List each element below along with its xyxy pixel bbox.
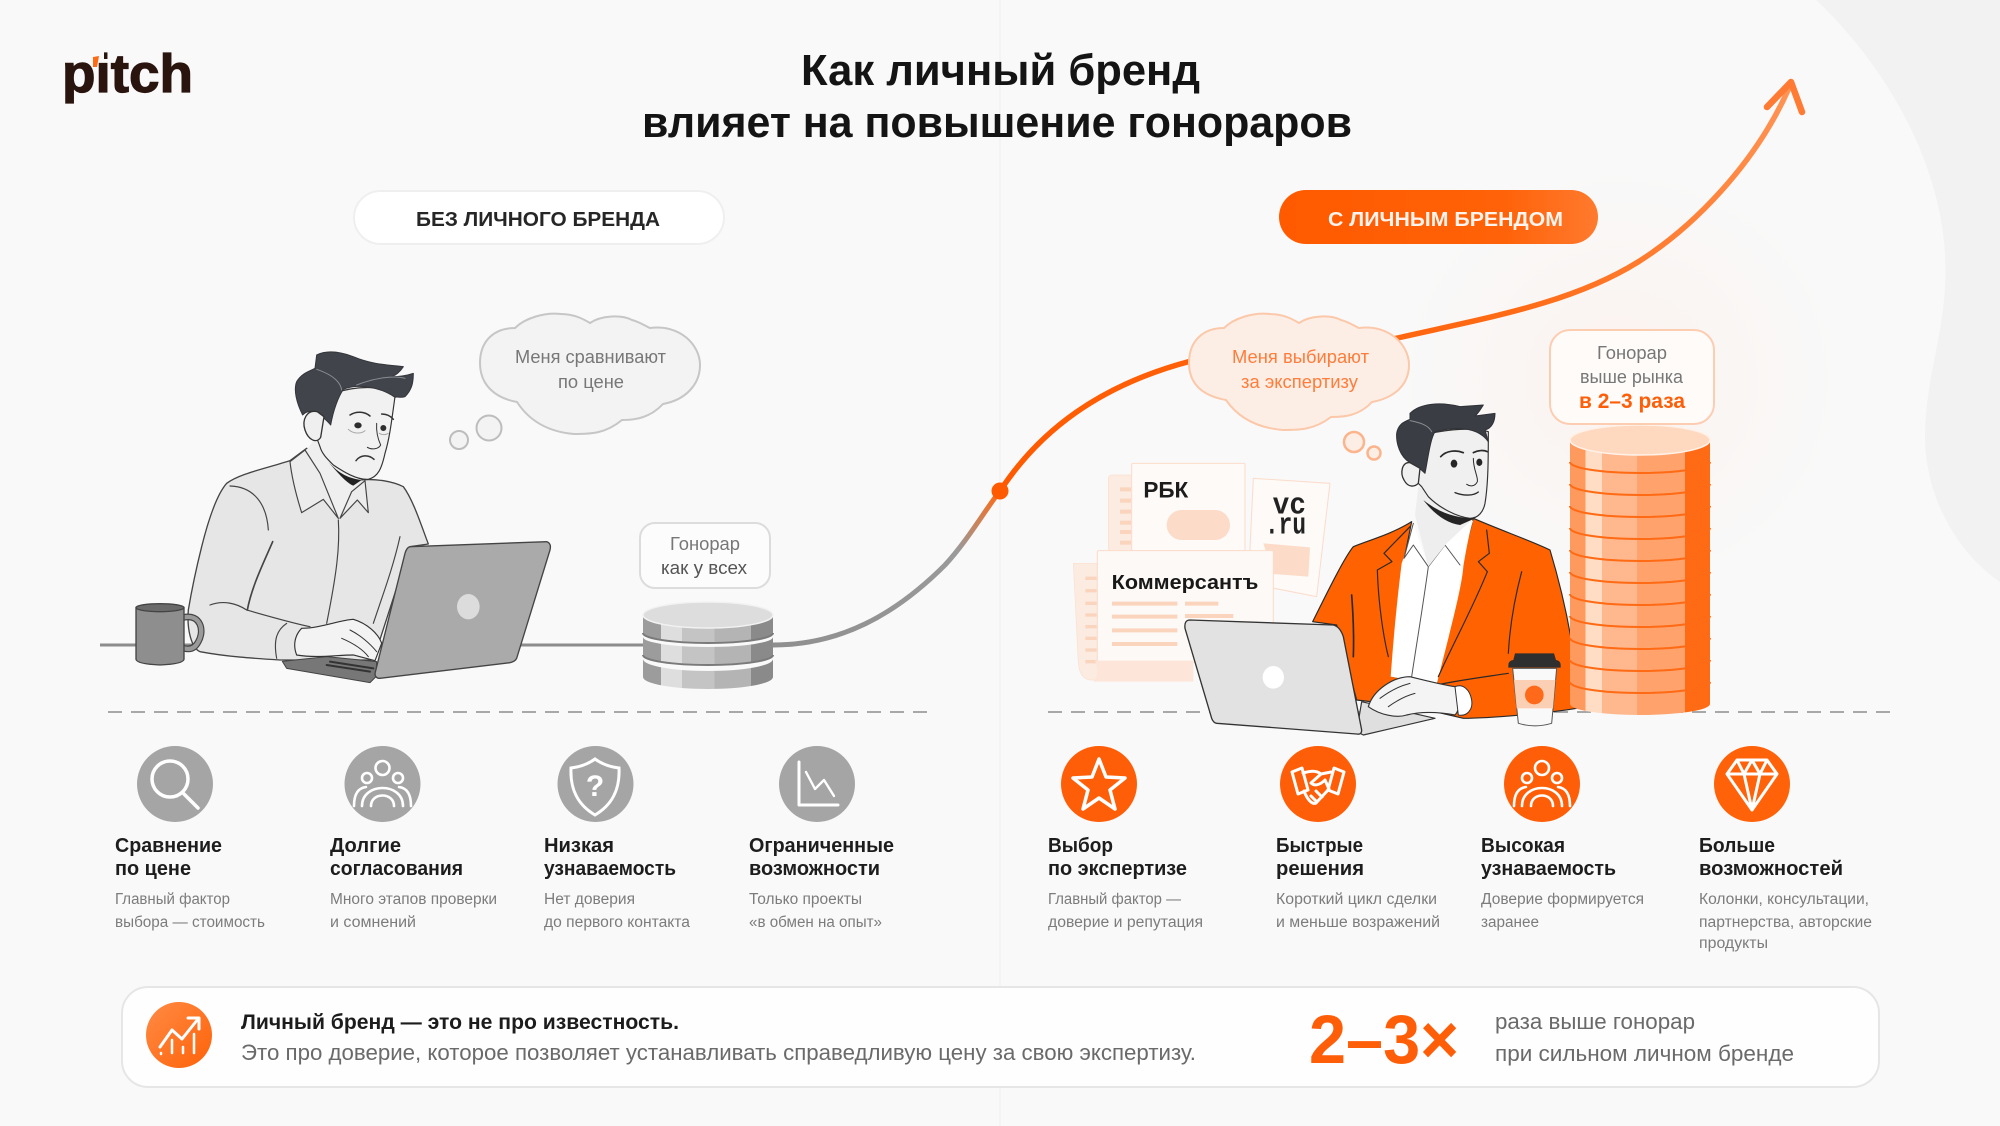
right column 2: Быстрые bbox=[1276, 835, 1363, 857]
white shirt bbox=[1391, 520, 1473, 685]
big number caption: раза выше гонорар bbox=[1495, 1009, 1695, 1034]
left column 3: узнаваемость bbox=[544, 858, 676, 880]
icon: diamond bbox=[1714, 746, 1790, 822]
title: Как личный бренд bbox=[801, 46, 1200, 95]
publications bbox=[1073, 463, 1330, 682]
icon: magnifier bbox=[137, 746, 213, 822]
growth curve: orange part with arrow bbox=[1000, 82, 1802, 491]
dashed divider right bbox=[1048, 711, 1890, 713]
collar bbox=[290, 450, 368, 518]
pill: без личного бренда: БЕЗ ЛИЧНОГО БРЕНДА bbox=[416, 209, 660, 231]
left column 1 bbox=[115, 835, 265, 931]
fee label: выше рынка: в 2–3 раза bbox=[1579, 390, 1685, 413]
coffee cup bbox=[1508, 653, 1561, 726]
hair bbox=[295, 352, 413, 425]
fee label: выше рынка bbox=[1550, 330, 1714, 424]
right column 1: Выбор bbox=[1048, 835, 1113, 857]
man without brand bbox=[136, 352, 550, 683]
background blob top right bbox=[1816, 0, 2000, 582]
Коммерсантъ document: Коммерсантъ bbox=[1112, 571, 1258, 594]
right column 2 bbox=[1276, 835, 1440, 931]
laptop base bbox=[282, 657, 377, 683]
thought cloud: меня выбирают: за экспертизу bbox=[1241, 372, 1358, 392]
fee label: выше рынка: Гонорар bbox=[1597, 343, 1667, 363]
thought cloud: меня выбирают bbox=[1189, 314, 1409, 460]
title bbox=[642, 46, 1352, 147]
fee label: как у всех: Гонорар bbox=[670, 534, 740, 554]
logo: pitch bbox=[62, 44, 193, 104]
chin shadow bbox=[1423, 500, 1475, 525]
vc.ru document bbox=[1248, 478, 1330, 597]
curve midpoint dot bbox=[992, 482, 1008, 500]
hand bbox=[295, 619, 382, 661]
big number caption bbox=[1495, 1009, 1794, 1066]
tall coin stack bbox=[1570, 425, 1710, 715]
left column 2: и сомнений bbox=[330, 914, 416, 931]
laptop base bbox=[1357, 702, 1435, 735]
bottom summary bar bbox=[122, 987, 1879, 1087]
neck bbox=[305, 437, 362, 518]
right column 2: решения bbox=[1276, 858, 1364, 880]
man with brand bbox=[1185, 404, 1577, 735]
shirt folds bbox=[210, 486, 400, 658]
left column 1: выбора — стоимость bbox=[115, 914, 265, 931]
left column 1: Главный фактор bbox=[115, 891, 230, 908]
left column 1: по цене bbox=[115, 858, 191, 880]
right column 3: узнаваемость bbox=[1481, 858, 1616, 880]
thought cloud: меня сравнивают: по цене bbox=[558, 372, 624, 392]
laptop lid bbox=[1185, 620, 1362, 734]
right column 3: Высокая bbox=[1481, 835, 1565, 857]
big number caption: при сильном личном бренде bbox=[1495, 1041, 1794, 1066]
mug bbox=[184, 617, 201, 649]
left column 2: Долгие bbox=[330, 835, 401, 857]
left column 2: согласования bbox=[330, 858, 463, 880]
left column 4: Только проекты bbox=[749, 891, 862, 908]
hand bbox=[1368, 677, 1459, 716]
thought cloud: меня сравнивают bbox=[450, 314, 700, 449]
right column 4: Больше bbox=[1699, 835, 1775, 857]
fee label: как у всех: как у всех bbox=[661, 558, 747, 578]
right column 3: Доверие формируется bbox=[1481, 891, 1644, 908]
thought cloud: меня сравнивают: Меня сравнивают bbox=[515, 347, 666, 367]
summary text: Это про доверие, которое позволяет устанавливать справедливую цену за свою экспертизу. bbox=[241, 1040, 1196, 1065]
left column 3: до первого контакта bbox=[544, 914, 690, 931]
lapels and folds bbox=[1352, 527, 1522, 685]
icon: growth chart bbox=[146, 1002, 212, 1068]
big number: 2–3× bbox=[1309, 1001, 1459, 1078]
title: влияет на повышение гонораров bbox=[642, 98, 1352, 147]
left column 2 bbox=[330, 835, 497, 931]
thought cloud: меня выбирают: Меня выбирают bbox=[1232, 347, 1369, 367]
hair bbox=[1397, 404, 1495, 473]
right column 4 bbox=[1699, 835, 1872, 952]
icon: people bbox=[344, 746, 420, 822]
icon: handshake bbox=[1280, 746, 1356, 822]
left column 3: Нет доверия bbox=[544, 891, 635, 908]
vc.ru document: .ru bbox=[1265, 508, 1306, 543]
fee label: выше рынка: выше рынка bbox=[1580, 367, 1684, 387]
table line bbox=[100, 644, 645, 646]
icon: shield with question bbox=[558, 746, 634, 822]
neck bbox=[1415, 487, 1473, 567]
summary text: Личный бренд — это не про известность. bbox=[241, 1011, 679, 1034]
left column 1: Сравнение bbox=[115, 835, 222, 857]
small coin stack bbox=[643, 602, 773, 689]
orange glow behind coins bbox=[1400, 170, 1840, 590]
РБК document bbox=[1108, 463, 1245, 552]
left column 2: Много этапов проверки bbox=[330, 891, 497, 908]
pill: без личного бренда bbox=[354, 191, 724, 244]
icon: people orange bbox=[1504, 746, 1580, 822]
icon: star bbox=[1061, 746, 1137, 822]
right column 4: партнерства, авторские bbox=[1699, 914, 1872, 931]
left column 4 bbox=[749, 835, 894, 931]
right column 1: Главный фактор — bbox=[1048, 891, 1181, 908]
face bbox=[1415, 429, 1488, 518]
right column 4: возможностей bbox=[1699, 858, 1843, 880]
jacket bbox=[1313, 518, 1577, 718]
growth curve: grey part bbox=[773, 491, 1000, 645]
laptop lid bbox=[375, 542, 550, 678]
face bbox=[315, 387, 395, 479]
Коммерсантъ document bbox=[1073, 551, 1273, 682]
right column 1: по экспертизе bbox=[1048, 858, 1187, 880]
shirt bbox=[188, 448, 428, 660]
icon: shield with question: ? bbox=[586, 770, 604, 803]
ear bbox=[304, 411, 324, 441]
right column 4: Колонки, консультации, bbox=[1699, 891, 1869, 908]
summary text bbox=[241, 1011, 1196, 1065]
left column 4: возможности bbox=[749, 858, 880, 880]
РБК document: РБК bbox=[1143, 478, 1189, 503]
fee label: как у всех bbox=[640, 523, 770, 588]
right column 2: Короткий цикл сделки bbox=[1276, 891, 1437, 908]
right column 2: и меньше возражений bbox=[1276, 914, 1440, 931]
right column 3 bbox=[1481, 835, 1644, 931]
icon: falling chart bbox=[779, 746, 855, 822]
dashed divider left bbox=[108, 711, 934, 713]
facial features bbox=[348, 412, 393, 461]
right column 3: заранее bbox=[1481, 914, 1539, 931]
pill: с личным брендом bbox=[1279, 190, 1598, 244]
ear bbox=[1402, 463, 1420, 486]
facial features bbox=[1441, 451, 1487, 495]
pill: с личным брендом: С ЛИЧНЫМ БРЕНДОМ bbox=[1328, 209, 1563, 231]
chin shadow bbox=[327, 460, 362, 486]
left column 3 bbox=[544, 835, 690, 931]
right column 4: продукты bbox=[1699, 935, 1768, 952]
left column 3: Низкая bbox=[544, 835, 614, 857]
left column 4: Ограниченные bbox=[749, 835, 894, 857]
vc.ru document: vc bbox=[1273, 488, 1306, 523]
right column 1 bbox=[1048, 835, 1203, 931]
right column 1: доверие и репутация bbox=[1048, 914, 1203, 931]
left column 4: «в обмен на опыт» bbox=[749, 914, 882, 931]
